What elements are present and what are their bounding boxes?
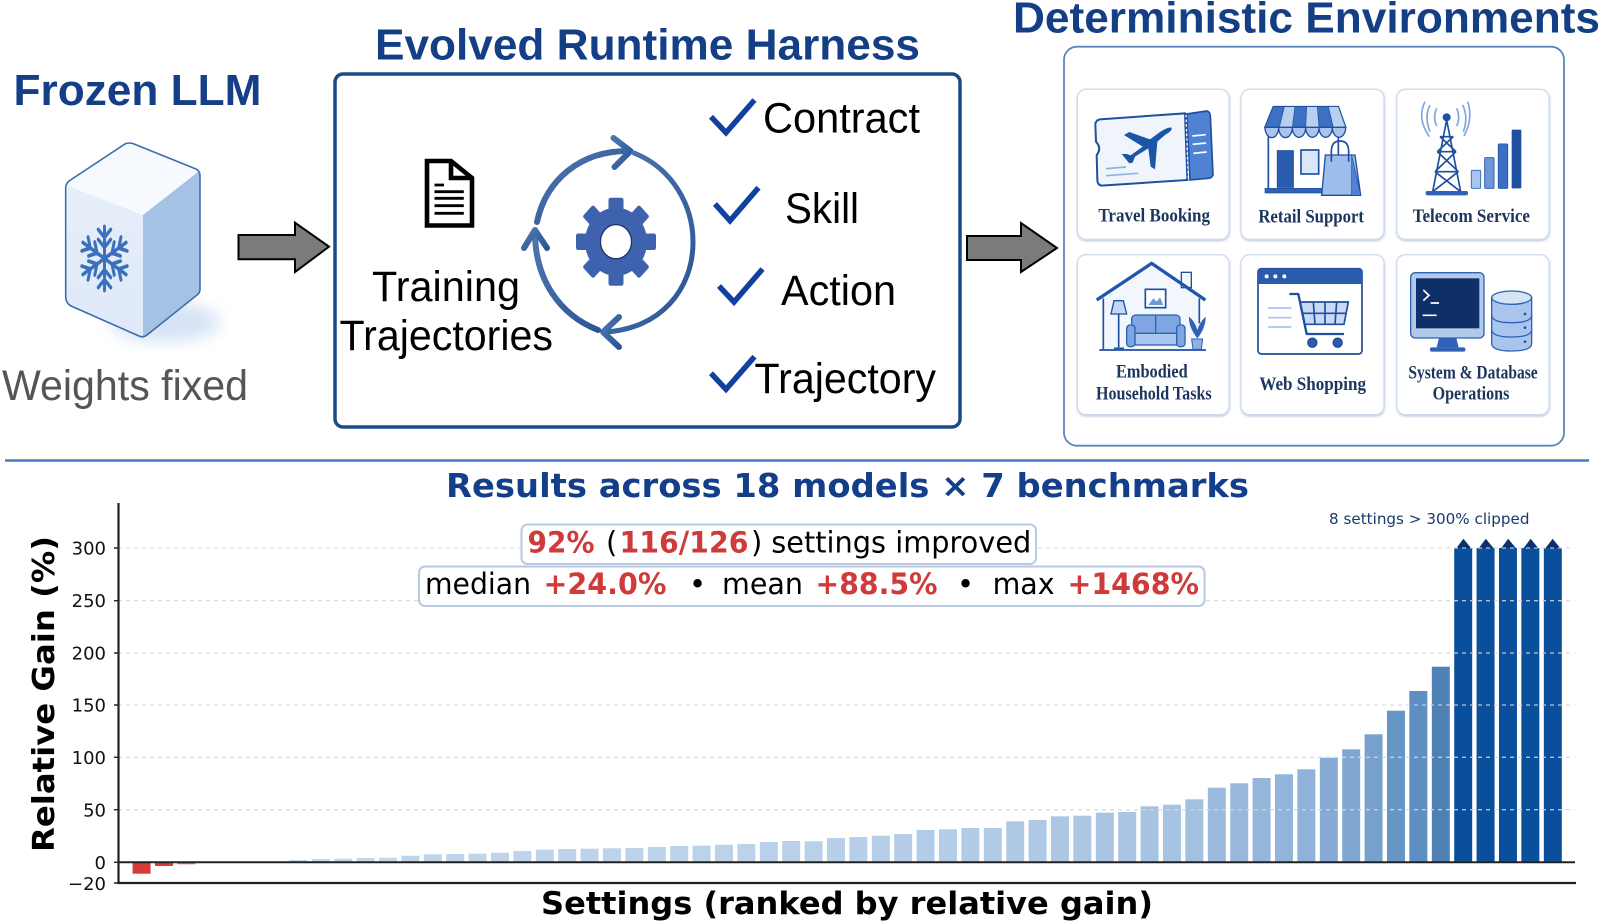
icon: plane ticket [1095, 111, 1213, 186]
panel: runtime harness [335, 74, 960, 427]
label: training trajectories [340, 263, 553, 360]
icon: storefront [1265, 107, 1361, 195]
callout: median mean max: +24.0% [544, 567, 666, 601]
checklist item: contract: Contract [763, 94, 920, 142]
panel: deterministic environments [1064, 47, 1564, 446]
bars [133, 548, 1562, 874]
callout: settings improved: ) [751, 526, 762, 560]
callout: median mean max: +88.5% [816, 567, 938, 601]
callout: median mean max: max [993, 567, 1055, 601]
callout: median mean max: median [425, 567, 531, 601]
y axis tick labels: 100 [72, 748, 106, 769]
card: travel booking [1077, 89, 1229, 239]
checklist item: skill: Skill [785, 185, 859, 233]
clip markers [1456, 539, 1560, 548]
callout: settings improved: settings improved [771, 526, 1031, 560]
label: training trajectories: Trajectories [340, 312, 553, 360]
label: Telecom Service [1413, 206, 1530, 227]
y axis tick labels: 50 [83, 800, 106, 822]
callout: settings improved [522, 524, 1036, 564]
icon: house [1097, 263, 1206, 350]
label: Web Shopping [1259, 374, 1366, 395]
icon: gear [576, 198, 656, 286]
label [1096, 362, 1212, 404]
callout: median mean max: mean [722, 567, 803, 601]
icon: terminal and database [1411, 273, 1532, 352]
y axis tick labels: 0 [95, 853, 106, 874]
card: telecom service [1397, 89, 1549, 239]
y axis tick labels: 200 [72, 644, 106, 664]
icon: cycle arrows [524, 138, 693, 347]
icon: browser and cart [1258, 269, 1362, 354]
label: Household Tasks [1096, 383, 1212, 404]
arrow: harness to environments [967, 223, 1057, 272]
label: Retail Support [1258, 206, 1364, 227]
label: Travel Booking [1098, 206, 1210, 227]
callout: median mean max [419, 566, 1204, 606]
y axis tick labels: 250 [72, 591, 106, 612]
caption: weights fixed: Weights fixed [2, 362, 248, 410]
y axis tick labels: 150 [72, 696, 106, 716]
card: embodied household tasks [1077, 255, 1229, 415]
callout: median mean max: • [689, 567, 706, 601]
y axis tick labels: −20 [68, 874, 106, 895]
heading: Evolved Runtime Harness: Evolved Runtime Harness [375, 20, 920, 70]
card: web shopping [1241, 255, 1384, 415]
icon: document [427, 161, 472, 226]
checklist item: action [719, 267, 896, 315]
callout: settings improved: 116/126 [620, 526, 748, 560]
y axis title: Relative Gain (%) [27, 536, 62, 852]
bar chart: relative gain by setting [27, 503, 1576, 922]
icon: frozen cube [66, 143, 220, 342]
y axis tick labels: 300 [72, 538, 106, 560]
checklist item: skill [715, 185, 859, 233]
callout: median mean max: +1468% [1068, 567, 1199, 601]
label: System & Database [1408, 362, 1538, 383]
x axis title: Settings (ranked by relative gain) [541, 886, 1153, 922]
label: training trajectories: Training [372, 263, 520, 311]
checklist item: trajectory: Trajectory [754, 355, 936, 403]
card: retail support [1241, 89, 1384, 239]
callout: settings improved: ( [606, 526, 617, 560]
callout: median mean max: • [957, 567, 974, 601]
label: Embodied [1116, 362, 1188, 383]
icon: signal tower [1422, 102, 1521, 195]
icon: snowflake [80, 226, 129, 290]
label: Operations [1433, 383, 1510, 404]
annotation: clipped settings: 8 settings > 300% clipped [1329, 510, 1530, 528]
heading: Frozen LLM: Frozen LLM [14, 66, 262, 115]
y axis tick labels [68, 538, 106, 895]
label [1408, 362, 1538, 404]
heading: results: Results across 18 models × 7 benchmarks [446, 466, 1249, 505]
checklist item: action: Action [781, 267, 896, 315]
card: system and database operations [1397, 255, 1549, 415]
callout: settings improved: 92% [528, 526, 594, 560]
arrow: LLM to harness [238, 223, 329, 272]
